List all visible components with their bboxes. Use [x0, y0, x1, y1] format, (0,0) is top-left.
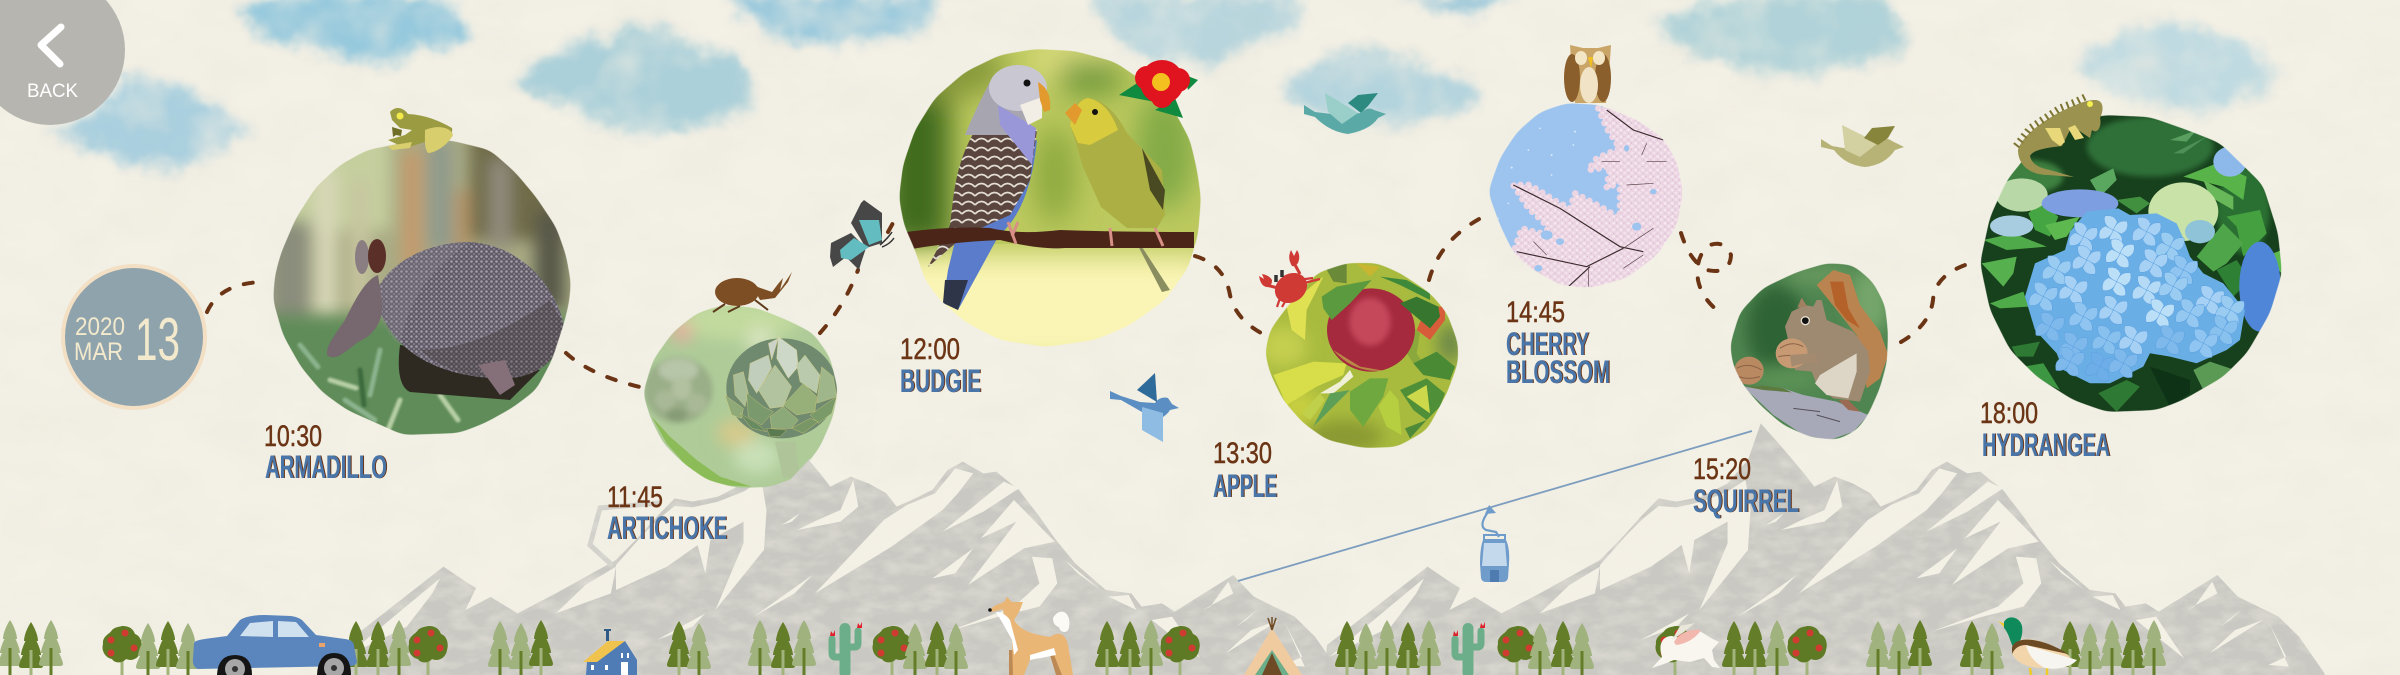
- label: armadillo: [264, 420, 387, 485]
- icon: olive bird: [1821, 125, 1904, 167]
- date year and month: [74, 313, 125, 366]
- photo: artichoke: [644, 306, 838, 488]
- label: artichoke: 11:45: [607, 481, 663, 514]
- label: armadillo: ARMADILLO: [265, 449, 387, 485]
- label: apple: APPLE: [1213, 468, 1277, 504]
- photo: armadillo: [274, 140, 571, 435]
- label: hydrangea: 18:00: [1980, 397, 2038, 430]
- label: apple: [1213, 437, 1277, 504]
- label: armadillo: 10:30: [264, 420, 322, 453]
- label: budgie: 12:00: [900, 333, 960, 366]
- label: artichoke: ARTICHOKE: [607, 510, 727, 546]
- label: budgie: [900, 333, 981, 399]
- label: apple: 13:30: [1213, 437, 1272, 470]
- label: hydrangea: HYDRANGEA: [1982, 427, 2110, 463]
- date year and month: MAR: [74, 338, 123, 366]
- cable car rope: [1238, 431, 1752, 581]
- icon: back chevron: [41, 27, 61, 64]
- photo: cherry blossom: [1490, 103, 1682, 288]
- back label: BACK: [27, 81, 78, 102]
- icon: blue bird: [1110, 373, 1179, 442]
- date badge: [61, 264, 207, 410]
- label: cherry blossom: CHERRY: [1506, 326, 1589, 362]
- label: squirrel: SQUIRREL: [1693, 483, 1799, 519]
- label: cherry blossom: [1506, 296, 1610, 390]
- label: squirrel: [1693, 453, 1799, 519]
- icon: blue car: [193, 615, 357, 675]
- label: hydrangea: [1980, 397, 2110, 463]
- photo: squirrel: [1730, 264, 1888, 440]
- icon: frog: [388, 108, 453, 153]
- left mountain range: [340, 423, 1340, 675]
- icon: gondola: [1480, 505, 1509, 582]
- back button: [0, 0, 125, 125]
- photo: budgies: [900, 49, 1201, 346]
- right mountain range: [1324, 423, 2324, 675]
- icon: owl: [1564, 45, 1611, 103]
- photo: apple: [1266, 262, 1458, 448]
- label: cherry blossom: 14:45: [1506, 296, 1565, 329]
- label: cherry blossom: BLOSSOM: [1506, 354, 1610, 390]
- label: budgie: BUDGIE: [900, 363, 981, 399]
- label: squirrel: 15:20: [1693, 453, 1751, 486]
- icon: mallard duck: [1998, 617, 2077, 675]
- icon: house: [583, 629, 637, 675]
- icon: shiba dog: [988, 597, 1073, 675]
- icon: crab: [1259, 250, 1320, 309]
- icon: rhinoceros beetle: [713, 272, 792, 312]
- row of trees: [0, 620, 2166, 675]
- date year and month: 2020: [75, 313, 125, 341]
- icon: red camellia: [1119, 60, 1198, 118]
- watercolor clouds: [45, 0, 2276, 169]
- icon: tipi: [1244, 617, 1302, 675]
- icon: butterfly: [830, 200, 894, 270]
- date day: 13: [135, 306, 180, 373]
- photo: hydrangea: [1980, 115, 2282, 412]
- icon: teal bird: [1304, 93, 1386, 134]
- icon: iguana: [2016, 97, 2103, 177]
- icon: white rabbit: [1652, 623, 1720, 668]
- label: artichoke: [607, 481, 727, 546]
- trail dashes: [207, 218, 1968, 387]
